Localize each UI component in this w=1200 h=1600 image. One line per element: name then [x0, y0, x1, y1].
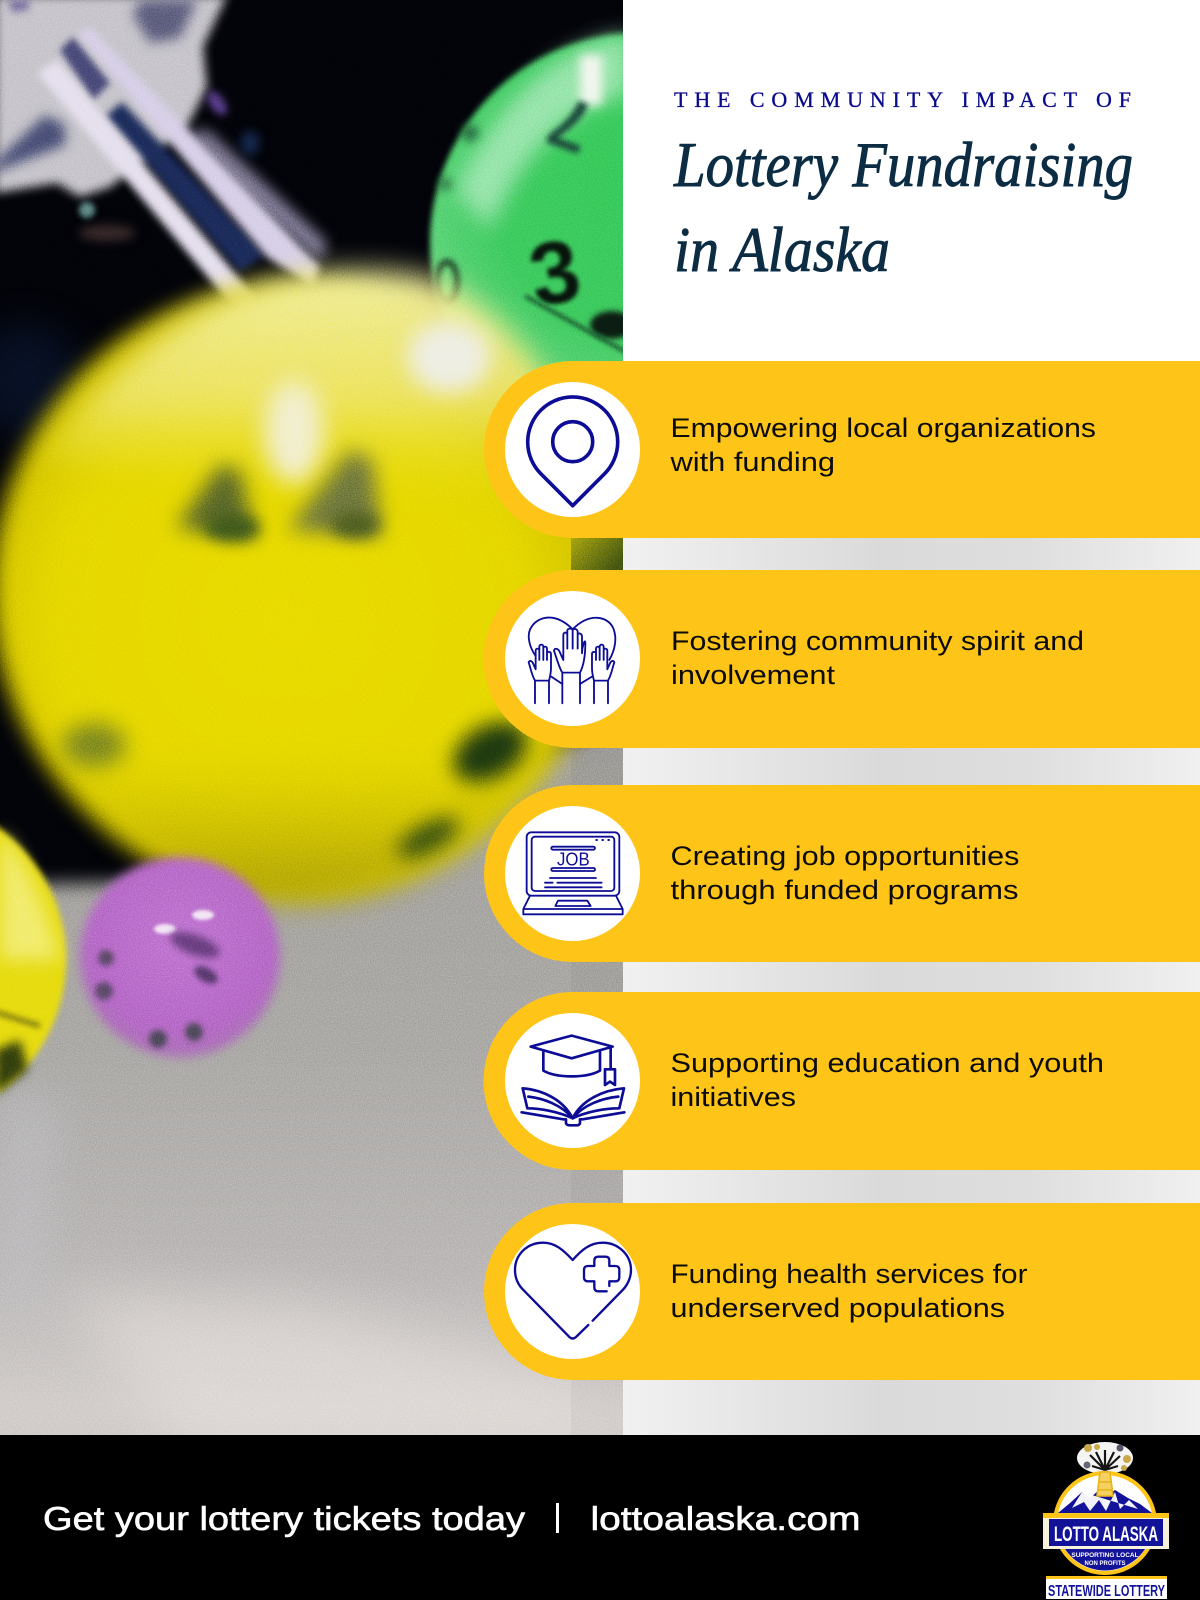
name banner	[1043, 1513, 1169, 1549]
call to action text	[43, 1500, 860, 1537]
green ball: 3	[522, 219, 588, 325]
main title: Lottery Fundraising	[673, 130, 1133, 200]
text: health services	[670, 1259, 1028, 1323]
small yellow ball at left edge	[0, 796, 66, 1124]
panel: empowering local organizations	[484, 361, 1200, 538]
badge circle with mountains	[1055, 1473, 1155, 1573]
icon: laptop with job listing: JOB	[557, 849, 590, 870]
text: job opportunities	[670, 841, 1020, 905]
green ball: 7	[538, 79, 603, 168]
text: education and youth	[670, 1048, 1104, 1112]
text: community spirit: involvement	[671, 660, 836, 690]
text: job opportunities: through funded programs	[670, 875, 1018, 905]
green ball	[425, 20, 623, 381]
logo: Lotto Alaska: SUPPORTING LOCAL	[1071, 1552, 1139, 1559]
purple ball	[80, 857, 280, 1057]
main title: in Alaska	[674, 215, 890, 285]
text: education and youth: initiatives	[670, 1082, 796, 1112]
dark navy shadows	[0, 325, 80, 435]
text: health services: underserved populations	[670, 1293, 1005, 1323]
panel: education and youth	[484, 992, 1200, 1170]
large yellow ball	[0, 270, 623, 900]
icon: location pin	[528, 397, 618, 506]
panel: health services	[484, 1203, 1200, 1380]
clear plastic tube	[0, 0, 327, 313]
blurred number 44	[176, 465, 255, 538]
money cloud	[1077, 1442, 1133, 1474]
text: community spirit	[671, 626, 1084, 690]
text: empowering	[669, 413, 1096, 477]
gray shadow strips between bars	[623, 538, 1200, 1435]
icon: hands and heart	[529, 618, 615, 703]
statewide lottery plate	[1046, 1576, 1167, 1599]
panel: community spirit	[484, 570, 1200, 748]
logo: Lotto Alaska	[1043, 1442, 1169, 1600]
heading block	[673, 87, 1133, 285]
call to action text: lottoalaska.com	[590, 1500, 860, 1537]
text: job opportunities: Creating job opportunities	[670, 841, 1020, 871]
panel: job opportunities	[484, 785, 1200, 962]
photo: blurred lottery balls	[0, 0, 623, 1435]
main title	[673, 130, 1133, 285]
logo: Lotto Alaska: NON PROFITS	[1084, 1561, 1126, 1567]
text: education and youth: Supporting education and youth	[670, 1048, 1104, 1078]
icon: laptop with job listing	[523, 832, 623, 914]
footer band	[0, 1435, 1200, 1600]
text: health services: Funding health services for	[670, 1259, 1028, 1289]
icon: graduation cap and book	[522, 1036, 624, 1125]
text: empowering: Empowering local organizations	[670, 413, 1096, 443]
call to action text: Get your lottery tickets today	[43, 1500, 526, 1537]
oil derrick	[1097, 1472, 1113, 1496]
text: empowering: with funding	[669, 447, 835, 477]
icon: heart with medical cross	[515, 1243, 631, 1338]
floor surface	[0, 746, 623, 1435]
lower arc	[1065, 1549, 1145, 1570]
text: community spirit: Fostering community spirit and	[671, 626, 1084, 656]
eyebrow heading: THE COMMUNITY IMPACT OF	[674, 87, 1131, 112]
